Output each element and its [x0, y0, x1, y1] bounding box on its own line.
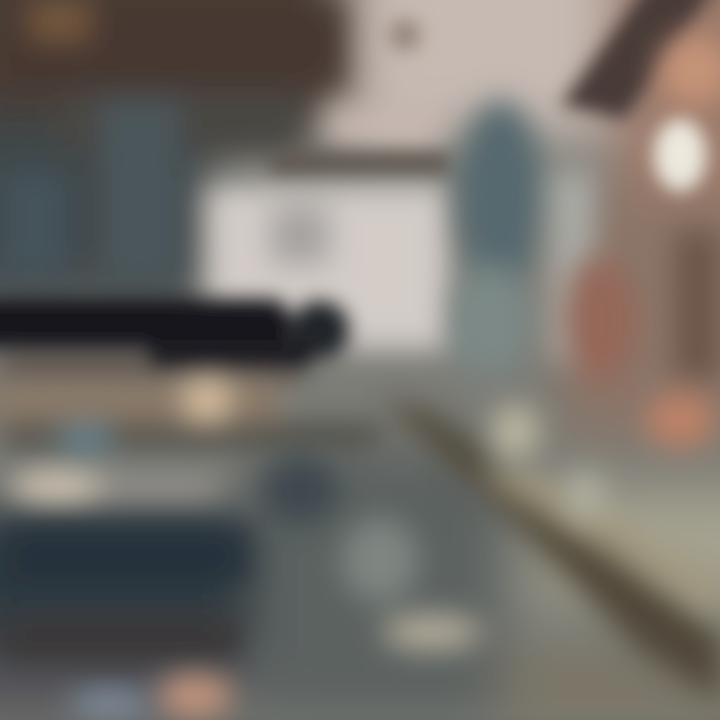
tan middle band [0, 382, 380, 456]
warm right side lights [564, 35, 720, 446]
blue-grey figure [450, 100, 595, 375]
dark shadow under black band [0, 350, 300, 380]
dark diagonal beam, top right [389, 0, 720, 120]
peach patch at bottom [157, 674, 233, 718]
brown diagonal ridge [380, 400, 720, 700]
lower dark mass [0, 455, 340, 660]
pale horizontal strip [8, 471, 220, 503]
dark upper structures [0, 0, 345, 280]
dark lintel [270, 152, 450, 174]
bright window spot [654, 119, 706, 191]
lit spot on tan band [181, 378, 233, 422]
black horizontal band [0, 298, 350, 368]
pale blue patch at bottom left [70, 690, 150, 718]
light central panel [205, 108, 450, 350]
pale lower highlights [342, 404, 603, 650]
